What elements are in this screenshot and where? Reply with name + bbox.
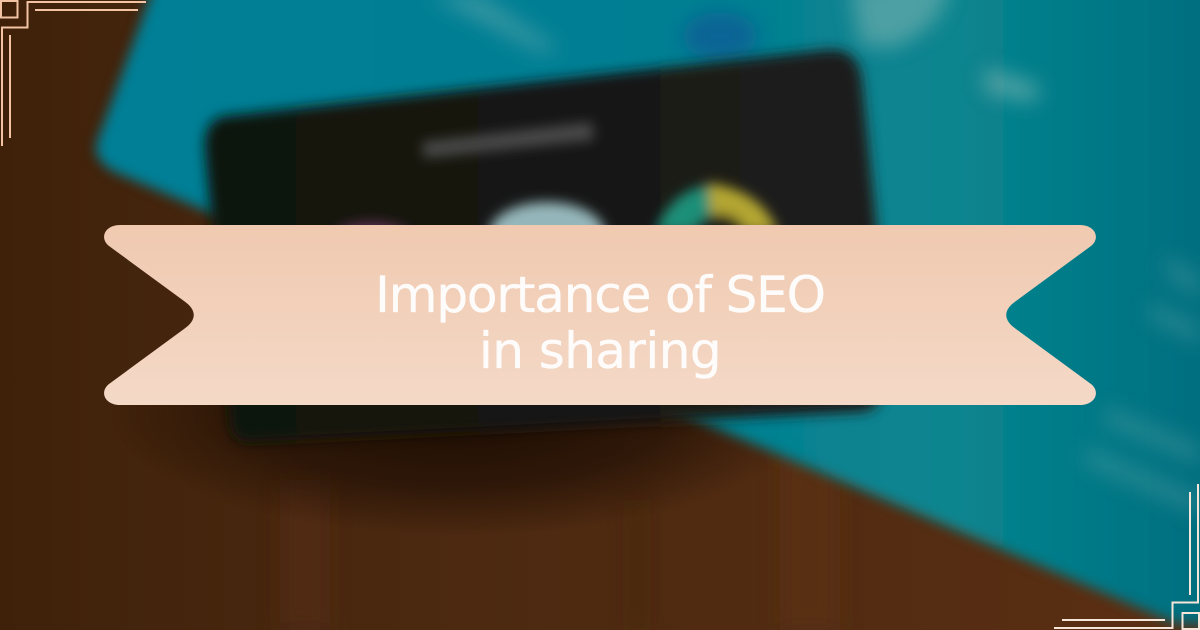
ribbon banner	[104, 225, 1096, 405]
phone body	[205, 50, 880, 442]
wood grain	[280, 450, 840, 630]
phone chart: green and yellow ring	[655, 183, 778, 232]
blue mark	[682, 12, 758, 60]
title: in sharing	[479, 322, 721, 380]
corner ornament top-left	[1, 1, 146, 146]
phone shadow on wood	[110, 285, 810, 535]
phone chart: purple	[334, 222, 410, 254]
title	[375, 266, 825, 380]
phone chart: pale	[489, 202, 605, 266]
corner ornament bottom-right	[1054, 484, 1199, 629]
paper light marks	[430, 0, 1200, 515]
phone screen title	[422, 122, 594, 158]
title: Importance of SEO	[375, 266, 825, 324]
